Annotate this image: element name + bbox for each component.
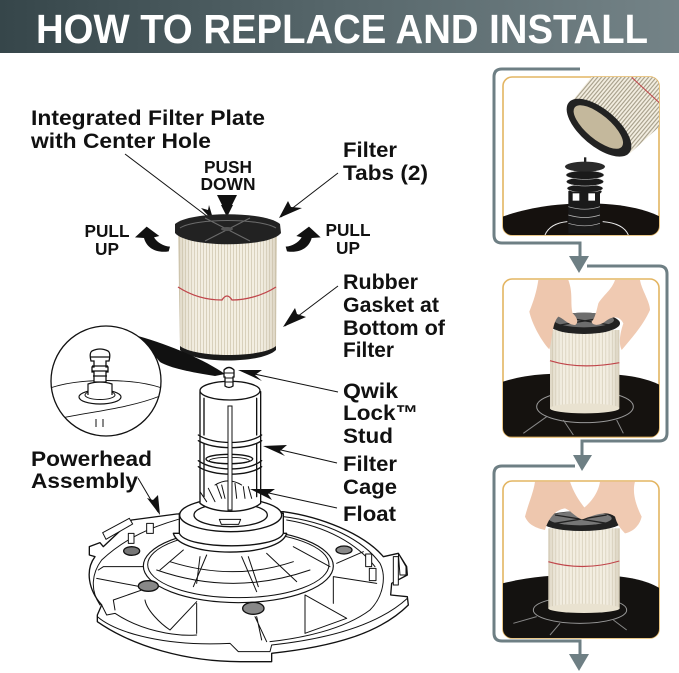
title banner: HOW TO REPLACE AND INSTALL [36, 6, 648, 52]
filter tilted [574, 77, 659, 154]
label: filter tabs: Tabs (2) [343, 161, 428, 185]
arrow: filter plate leader [125, 154, 214, 222]
label: qwik lock stud: Qwik [343, 379, 398, 403]
left hand [525, 482, 587, 530]
label: filter tabs [343, 138, 428, 185]
filter cage [198, 381, 262, 511]
arrow: filter cage leader [263, 445, 337, 463]
inset: stud detail circle [50, 326, 225, 436]
label: pull up left: UP [95, 239, 119, 259]
left hand [529, 280, 577, 349]
label: filter cage [343, 452, 398, 499]
label: pull up left: PULL [84, 221, 130, 241]
base spokes and ribs [97, 547, 377, 642]
arrow: qwik lock leader [238, 370, 338, 392]
label: powerhead assembly: Powerhead [31, 447, 152, 471]
label: push down: PUSH [204, 157, 252, 177]
arrow: powerhead leader [138, 478, 160, 515]
qwik lock stud [224, 368, 234, 388]
label: filter cage: Filter [343, 452, 398, 476]
base plate rim [89, 512, 408, 662]
label: integrated filter plate: with Center Hole [30, 129, 211, 153]
panel: step 3 [503, 481, 660, 638]
base ring [143, 529, 333, 603]
cage stack [565, 157, 605, 233]
label: qwik lock stud: Lock™ [343, 401, 418, 425]
panel: step 1 [503, 77, 667, 237]
arrow: rubber gasket leader [283, 286, 338, 327]
right hand [592, 280, 650, 350]
flow connector 1 [494, 69, 589, 273]
filter cartridge [175, 214, 281, 360]
vac base [503, 203, 660, 237]
label: float: Float [343, 502, 396, 526]
label: pull up left [84, 221, 130, 259]
red band [178, 287, 276, 300]
arrow: push down [217, 195, 237, 217]
panel: step 2 [503, 279, 660, 437]
flow connector 2 [573, 266, 667, 471]
label: integrated filter plate [30, 106, 265, 153]
arrow: pull up left [135, 227, 170, 252]
flow connector 3 [494, 466, 589, 671]
powerhead assembly drawing [89, 381, 408, 662]
right hand [581, 482, 642, 533]
label: push down: DOWN [200, 174, 256, 194]
screw posts [103, 518, 406, 614]
label: powerhead assembly [31, 447, 152, 493]
tower base [173, 498, 287, 552]
label: qwik lock stud: Stud [343, 424, 393, 448]
label: qwik lock stud [343, 379, 418, 448]
label: pull up right: PULL [326, 220, 371, 240]
label: pull up right [326, 220, 371, 258]
rubber gasket [180, 346, 276, 360]
label: rubber gasket: Bottom of [343, 316, 446, 340]
arrow: filter tabs leader [279, 173, 338, 218]
label: rubber gasket: Gasket at [343, 293, 439, 317]
label: filter tabs: Filter [343, 138, 398, 162]
label: filter cage: Cage [343, 475, 397, 499]
label: powerhead assembly: Assembly [31, 469, 138, 493]
label: push down [200, 157, 256, 194]
arrow: pull up right [286, 227, 321, 252]
arrow: float leader [250, 489, 337, 508]
black filter plate [175, 214, 281, 244]
label: rubber gasket [343, 270, 446, 362]
label: integrated filter plate: Integrated Filter Plate [31, 106, 265, 130]
label: pull up right: UP [336, 238, 360, 258]
label: rubber gasket: Rubber [343, 270, 419, 294]
pleated body [178, 236, 277, 358]
label: rubber gasket: Filter [343, 338, 395, 362]
